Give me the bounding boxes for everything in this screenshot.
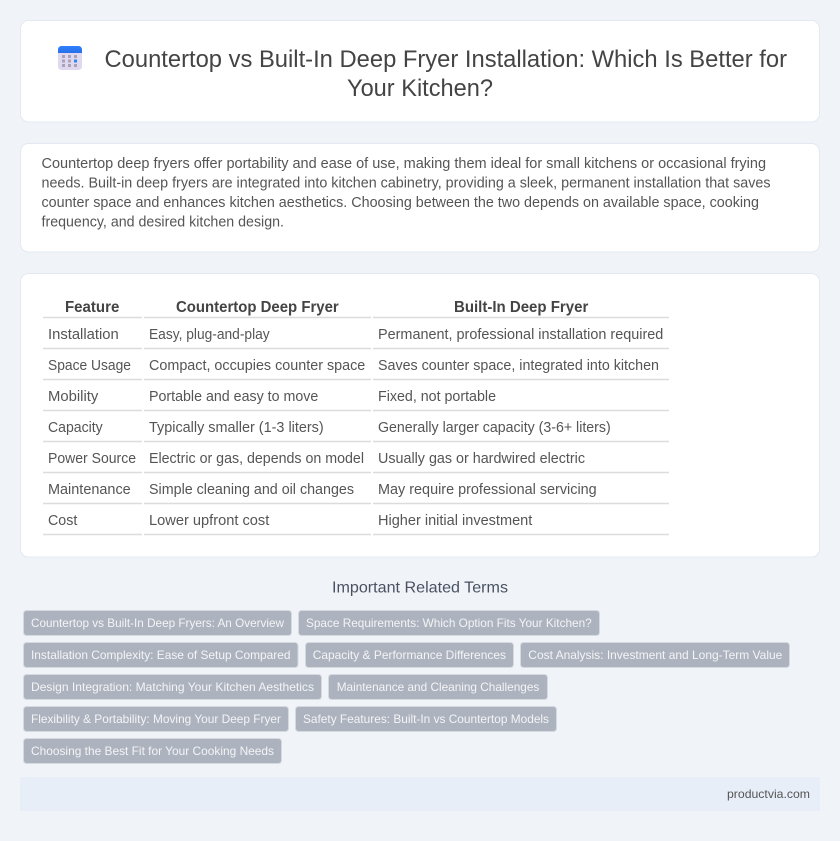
tag: Design Integration: Matching Your Kitchen Aesthetics — [31, 680, 314, 694]
table header row: Countertop Deep Fryer — [176, 299, 339, 316]
panel: comparison table — [20, 274, 820, 557]
tag: Choosing the Best Fit for Your Cooking Needs — [31, 744, 274, 758]
panel: header — [20, 20, 820, 122]
tag: Countertop vs Built-In Deep Fryers: An Overview — [31, 616, 284, 630]
table header row: Built-In Deep Fryer — [454, 299, 588, 316]
row: installation: Permanent, professional installation required — [378, 327, 663, 343]
tag — [298, 610, 600, 636]
tag: Safety Features: Built-In vs Countertop Models — [303, 712, 549, 726]
tag — [24, 674, 322, 700]
title: Your Kitchen? — [347, 75, 493, 102]
row: maintenance — [48, 482, 597, 498]
row: mobility: Portable and easy to move — [149, 389, 318, 405]
icon: calendar — [58, 46, 82, 70]
tag: Capacity & Performance Differences — [313, 648, 506, 662]
tag — [520, 642, 790, 668]
tag — [296, 706, 556, 732]
tag — [24, 642, 298, 668]
footer: productvia.com — [727, 787, 810, 801]
tag: Installation Complexity: Ease of Setup Compared — [31, 648, 290, 662]
row: cost: Cost — [48, 513, 77, 529]
tag — [24, 738, 282, 764]
row: maintenance: Maintenance — [48, 482, 131, 498]
tag: Cost Analysis: Investment and Long-Term Value — [528, 648, 783, 662]
tag: Maintenance and Cleaning Challenges — [337, 680, 539, 694]
panel: summary paragraph — [20, 144, 820, 252]
row: cost: Higher initial investment — [378, 513, 532, 529]
row: capacity: Generally larger capacity (3-6+ liters) — [378, 420, 611, 436]
table header row: Feature — [65, 299, 119, 316]
tag — [24, 706, 288, 732]
row: installation: Easy, plug-and-play — [149, 327, 270, 343]
row: power source: Usually gas or hardwired electric — [378, 451, 585, 467]
row: capacity: Typically smaller (1-3 liters) — [149, 420, 324, 436]
row: space usage: Saves counter space, integrated into kitchen — [378, 358, 659, 374]
row: space usage: Compact, occupies counter space — [149, 358, 365, 374]
row: cost — [48, 513, 532, 529]
summary text — [42, 156, 770, 230]
row: mobility — [48, 389, 496, 405]
row: maintenance: Simple cleaning and oil changes — [149, 482, 354, 498]
row: mobility: Mobility — [48, 389, 99, 405]
row: maintenance: May require professional servicing — [378, 482, 597, 498]
title — [104, 46, 787, 102]
row: capacity — [48, 420, 611, 436]
tag — [306, 642, 514, 668]
row: installation — [48, 327, 663, 343]
row: power source: Electric or gas, depends on model — [149, 451, 364, 467]
summary text: frequency, and desired kitchen design. — [42, 214, 284, 230]
row: power source: Power Source — [48, 451, 136, 467]
tag — [24, 610, 292, 636]
row: space usage — [48, 358, 659, 374]
row: mobility: Fixed, not portable — [378, 389, 496, 405]
summary text: counter space and enhances kitchen aesthetics. Choosing between the two depends on available space, cooking — [42, 195, 759, 211]
row: capacity: Capacity — [48, 420, 103, 436]
footer — [20, 777, 820, 811]
summary text: needs. Built-in deep fryers are integrated into kitchen cabinetry, providing a sleek, permanent installation that saves — [42, 176, 770, 192]
summary text: Countertop deep fryers offer portability and ease of use, making them ideal for small kitchens or occasional frying — [42, 156, 766, 172]
tag — [328, 674, 548, 700]
row: installation: Installation — [48, 327, 119, 343]
tag: Flexibility & Portability: Moving Your Deep Fryer — [31, 712, 281, 726]
title: Countertop vs Built-In Deep Fryer Installation: Which Is Better for — [104, 46, 787, 73]
tag: Space Requirements: Which Option Fits Your Kitchen? — [306, 616, 592, 630]
related term tags — [24, 610, 790, 764]
row: power source — [48, 451, 585, 467]
heading: important related terms: Important Related Terms — [332, 580, 508, 596]
row: space usage: Space Usage — [48, 358, 131, 374]
row: cost: Lower upfront cost — [149, 513, 269, 529]
table header row — [65, 299, 588, 316]
